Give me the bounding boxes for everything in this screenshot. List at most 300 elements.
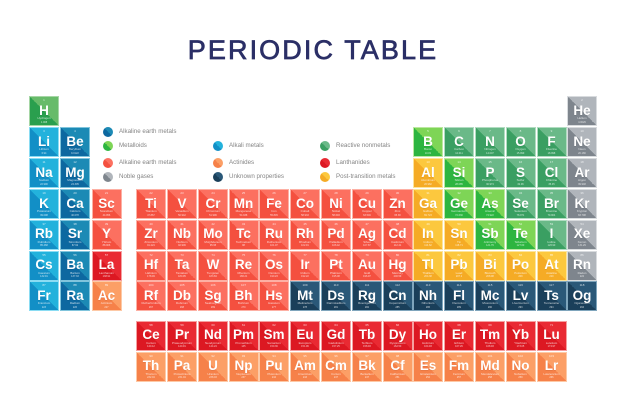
- element: At: At: [544, 257, 559, 272]
- element: W: 183.84: [209, 275, 217, 278]
- element: Og: Og: [573, 288, 591, 302]
- element: Te: Te: [513, 226, 528, 241]
- element: Fm: 257: [457, 376, 461, 379]
- element: Yb: [506, 320, 536, 350]
- element: U: U: [208, 358, 218, 373]
- element: Ag: [352, 220, 382, 250]
- legend item: post-transition metals: [320, 172, 396, 182]
- element: Pb: 207.2: [456, 275, 462, 278]
- element: Te: 127.60: [517, 244, 524, 247]
- element: Sg: 106: [210, 283, 216, 287]
- legend item: reactive nonmetals: Reactive nonmetals: [336, 142, 390, 149]
- element: Kr: [567, 189, 597, 219]
- element: P: 15: [488, 160, 492, 164]
- element: Cd: 48: [396, 222, 399, 226]
- legend item: reactive nonmetals: [320, 141, 390, 151]
- element: Fl: [444, 281, 474, 311]
- element: Mg: 12: [73, 160, 77, 164]
- element: Tl: [413, 250, 443, 280]
- element: In: Indium: [423, 240, 432, 244]
- element: Ir: 77: [303, 252, 307, 256]
- element: Mo: Mo: [203, 226, 223, 241]
- element: Sb: [475, 220, 505, 250]
- element: Fe: [259, 189, 289, 219]
- element: Rg: 282: [365, 306, 369, 308]
- element: Mn: Mn: [234, 196, 253, 210]
- element: Pa: 231.04: [178, 376, 186, 379]
- element: Lv: 116: [518, 283, 523, 287]
- element: C: 6: [458, 129, 460, 133]
- element: Tc: Tc: [236, 226, 251, 241]
- element: Am: Americium: [298, 372, 312, 376]
- element: U: [198, 352, 228, 382]
- element: Th: 232.04: [147, 376, 155, 379]
- element: Nd: Neodymium: [205, 340, 221, 344]
- element: Ac: [92, 281, 122, 311]
- element: Tl: 81: [426, 252, 430, 256]
- element: Cl: [536, 158, 566, 188]
- element: Md: [475, 352, 505, 382]
- element: Es: 99: [426, 354, 430, 358]
- element: Ba: 56: [73, 252, 77, 256]
- element: Au: 196.97: [363, 275, 371, 278]
- element: C: [444, 127, 474, 157]
- element: Po: Polonium: [514, 270, 527, 274]
- element: Be: 4: [74, 129, 76, 133]
- element: Ca: Ca: [66, 196, 84, 210]
- element: Gd: Gadolinium: [328, 340, 344, 344]
- element: Lv: Livermorium: [512, 301, 529, 305]
- element: Br: 35: [550, 191, 553, 195]
- element: N: N: [485, 134, 495, 148]
- element: W: Tungsten: [207, 270, 219, 274]
- element: Ar: 18: [580, 160, 584, 164]
- element: Lv: [506, 281, 536, 311]
- element: P: 30.974: [486, 182, 494, 186]
- element: Rg: Roentgenium: [358, 301, 376, 305]
- legend: [103, 127, 396, 182]
- element: Mt: 278: [303, 306, 307, 308]
- element: Hg: Hg: [388, 257, 406, 272]
- element: Fe: 55.845: [270, 214, 278, 216]
- element: Np: [228, 352, 258, 382]
- element: Zr: 40: [149, 222, 153, 226]
- element: Hg: 80: [396, 252, 399, 256]
- element: P: P: [485, 164, 494, 180]
- element: Es: 252: [426, 376, 430, 379]
- element: Ag: Ag: [358, 226, 376, 241]
- legend item: noble gases: [103, 172, 154, 182]
- legend item: unknown properties: [213, 172, 284, 182]
- element: Xe: [567, 220, 597, 250]
- element: Ti: 22: [149, 191, 153, 195]
- element: Tc: Technetium: [236, 240, 251, 244]
- element: V: 50.942: [178, 214, 186, 216]
- element: Db: Db: [173, 288, 191, 302]
- element: Pb: [444, 250, 474, 280]
- element: Ga: 69.723: [424, 214, 432, 216]
- element: Rh: 45: [303, 222, 307, 226]
- element: Br: [536, 189, 566, 219]
- element: Bi: 208.98: [486, 275, 494, 278]
- element: Rf: 104: [148, 283, 154, 287]
- element: Dy: Dy: [389, 327, 406, 342]
- element: Rb: Rubidium: [38, 240, 50, 244]
- element: Sm: [259, 320, 289, 350]
- element: S: 32.06: [517, 182, 524, 186]
- element: Co: Co: [296, 196, 314, 210]
- element: Pt: Platinum: [330, 270, 342, 274]
- element: Sb: Sb: [481, 226, 499, 241]
- element: Pa: 91: [180, 354, 184, 358]
- element: Si: Silicon: [455, 178, 463, 182]
- element: Ba: Ba: [66, 257, 84, 272]
- element: Md: Md: [480, 358, 500, 373]
- element: Yb: Yb: [512, 327, 529, 342]
- element: Sn: 50: [457, 222, 461, 226]
- element: Cr: [198, 189, 228, 219]
- element: Sr: 87.62: [72, 244, 78, 247]
- element: As: 74.922: [486, 214, 494, 216]
- element: Cr: Cr: [205, 196, 220, 210]
- element: K: 19: [42, 191, 46, 195]
- element: Cs: 55: [42, 252, 46, 256]
- element: Be: [60, 127, 90, 157]
- element: Se: [506, 189, 536, 219]
- element: Co: Cobalt: [301, 209, 309, 213]
- element: I: [536, 220, 566, 250]
- element: Pu: Pu: [265, 358, 283, 373]
- element: Np: Np: [234, 358, 252, 373]
- element: B: Boron: [424, 147, 432, 151]
- element: Rh: Rhodium: [299, 240, 311, 244]
- element: Cf: [382, 352, 412, 382]
- element: Nd: Nd: [204, 327, 222, 342]
- element: Ne: [567, 127, 597, 157]
- element: Ga: Ga: [419, 196, 437, 210]
- element: Ho: 164.93: [424, 345, 432, 348]
- element: Sc: [92, 189, 122, 219]
- element: Cs: 132.91: [40, 275, 48, 278]
- element: Ge: [444, 189, 474, 219]
- element: Hf: 178.49: [147, 275, 155, 278]
- element: Ts: 117: [549, 283, 554, 287]
- element: Am: Am: [294, 358, 316, 373]
- element: Os: 76: [272, 252, 276, 256]
- element: In: 114.82: [424, 244, 432, 247]
- element: Hs: Hs: [265, 288, 283, 302]
- element: Lu: [536, 320, 566, 350]
- element: S: S: [516, 164, 525, 180]
- element: Tm: 69: [488, 322, 492, 326]
- element: Sn: Tin: [457, 240, 461, 244]
- element: Ta: 73: [180, 252, 184, 256]
- element: Sg: Seaborgium: [205, 301, 221, 305]
- element: Re: Re: [235, 257, 252, 272]
- element: Ti: [136, 189, 166, 219]
- element: Si: [444, 158, 474, 188]
- element: Lu: Lutetium: [546, 340, 557, 344]
- element: I: Iodine: [547, 240, 556, 244]
- element: Y: Y: [102, 226, 111, 241]
- element: S: [506, 158, 536, 188]
- element: Nb: Nb: [173, 226, 191, 241]
- element: Rb: [29, 220, 59, 250]
- element: Re: [228, 250, 258, 280]
- element: Ac: Actinium: [101, 301, 112, 305]
- element: Tc: [228, 220, 258, 250]
- element: Rn: [567, 250, 597, 280]
- element: Ge: Ge: [450, 196, 468, 210]
- element: Nd: 60: [211, 322, 215, 326]
- element: He: He: [573, 102, 591, 118]
- element: Og: Oganesson: [574, 301, 590, 305]
- element: Nh: Nh: [419, 288, 437, 302]
- element: Pu: 244: [272, 376, 276, 379]
- element: Xe: 54: [580, 222, 584, 226]
- element: At: 85: [550, 252, 553, 256]
- element: Cl: Chlorine: [546, 178, 557, 182]
- element: Fr: 223: [42, 306, 46, 308]
- element: Hg: [382, 250, 412, 280]
- element: Sc: 44.956: [103, 214, 110, 216]
- title: PERIODIC TABLE: [188, 35, 438, 65]
- element: Sn: [444, 220, 474, 250]
- element: Fr: Fr: [37, 288, 51, 302]
- element: Pt: 78: [334, 252, 338, 256]
- element: Al: Al: [421, 164, 435, 180]
- element: Ti: Titanium: [145, 209, 157, 213]
- element: Cr: Chromium: [206, 209, 220, 213]
- element: Pd: Palladium: [329, 240, 343, 244]
- element: Li: 3: [43, 129, 45, 133]
- element: Ga: 31: [426, 191, 430, 195]
- element: La: Lanthanum: [99, 270, 114, 274]
- element: F: [536, 127, 566, 157]
- element: H: Hydrogen: [37, 116, 50, 120]
- element: Cf: Cf: [390, 358, 405, 373]
- element: Tc: 43: [242, 222, 245, 226]
- element: Fl: 289: [457, 306, 461, 308]
- element: Tb: Terbium: [362, 340, 372, 344]
- element: Li: 6.94: [42, 152, 46, 154]
- element: C: Carbon: [454, 147, 464, 151]
- element: Ru: Ru: [265, 226, 283, 241]
- element: Ne: 20.180: [578, 152, 586, 154]
- element: Rg: Rg: [358, 288, 376, 302]
- element: Tm: [475, 320, 505, 350]
- element: U: Uranium: [207, 372, 219, 376]
- element: Cl: 17: [550, 160, 553, 164]
- element: Bk: Bk: [358, 358, 376, 373]
- element: Bh: [228, 281, 258, 311]
- element: Pt: 195.08: [332, 275, 340, 278]
- element: Bi: 83: [488, 252, 492, 256]
- element: F: 9: [551, 129, 552, 133]
- element: Na: 22.990: [40, 182, 48, 186]
- element: Pa: Protactinium: [174, 372, 190, 376]
- element: Cd: 112.41: [394, 244, 401, 247]
- legend item: alkaline earth metals: [103, 127, 176, 137]
- element: S: 16: [519, 160, 522, 164]
- element: Np: Neptunium: [236, 372, 251, 376]
- element: Tl: 204.38: [424, 275, 432, 278]
- element: In: 49: [426, 222, 430, 226]
- element: Rb: 85.468: [40, 244, 48, 247]
- element: Eu: Europium: [299, 340, 311, 344]
- element: Es: Es: [420, 358, 436, 373]
- element: N: Nitrogen: [484, 147, 496, 151]
- element: Og: 294: [580, 306, 584, 308]
- element: Ga: [413, 189, 443, 219]
- element: Lr: Lawrencium: [543, 372, 560, 376]
- element: Lu: Lu: [543, 327, 560, 342]
- element: Ce: Cerium: [146, 340, 156, 344]
- element: Cn: [382, 281, 412, 311]
- element: Er: 68: [457, 322, 461, 326]
- element: Hf: 72: [149, 252, 153, 256]
- element: Sg: 269: [211, 306, 215, 308]
- element: Hg: Mercury: [392, 270, 403, 274]
- element: No: Nobelium: [514, 372, 527, 376]
- element: Ca: Calcium: [70, 209, 80, 213]
- element: Hf: Hafnium: [145, 270, 157, 274]
- element: Sr: [60, 220, 90, 250]
- element: Pu: Plutonium: [267, 372, 281, 376]
- element: Ir: Iridium: [300, 270, 310, 274]
- element: Ds: Ds: [327, 288, 345, 302]
- element: Pd: [321, 220, 351, 250]
- legend item: lanthanides: [320, 158, 370, 168]
- element: Cf: Californium: [390, 372, 405, 376]
- element: Cr: 51.996: [209, 214, 217, 216]
- element: Ta: Ta: [175, 257, 189, 272]
- element: Mn: Manganese: [236, 209, 251, 213]
- element: F: Fluorine: [546, 147, 557, 151]
- element: In: In: [422, 226, 434, 241]
- element: Dy: Dysprosium: [390, 340, 405, 344]
- element: Bk: Berkelium: [360, 372, 374, 376]
- element: Cu: Cu: [358, 196, 376, 210]
- element: Dy: 66: [396, 322, 399, 326]
- element: Dy: 162.50: [394, 345, 401, 348]
- element: Cl: Cl: [545, 164, 558, 180]
- element: Pb: Pb: [450, 257, 468, 272]
- element: Nh: [413, 281, 443, 311]
- element: N: [475, 127, 505, 157]
- element: Po: [506, 250, 536, 280]
- element: Ne: 10: [580, 129, 584, 133]
- element: Ti: 47.867: [147, 214, 155, 216]
- element: Si: 14: [457, 160, 461, 164]
- element: Bh: Bohrium: [238, 301, 249, 305]
- legend item: alkali metals: [213, 141, 264, 151]
- element: Kr: Krypton: [577, 209, 587, 213]
- element: La: 57: [105, 252, 108, 256]
- element: Hs: 108: [271, 283, 276, 287]
- element: Eu: [290, 320, 320, 350]
- element: No: [506, 352, 536, 382]
- element: K: Potassium: [37, 209, 51, 213]
- element: Cd: Cadmium: [391, 240, 404, 244]
- element: Sb: Antimony: [484, 240, 496, 244]
- element: Fr: 87: [42, 283, 46, 287]
- element: Am: [290, 352, 320, 382]
- element: Mg: [60, 158, 90, 188]
- element: O: Oxygen: [515, 147, 526, 151]
- element: Md: 101: [487, 354, 492, 358]
- element: Si: 28.085: [455, 182, 463, 186]
- element: K: [29, 189, 59, 219]
- element: Br: Br: [544, 196, 559, 210]
- element: Po: 209: [518, 275, 523, 278]
- element: Rg: [352, 281, 382, 311]
- element: Y: [92, 220, 122, 250]
- element: Rg: 111: [365, 283, 369, 287]
- element: F: F: [547, 134, 556, 148]
- element: Ca: 40.078: [71, 214, 79, 216]
- element: Mo: 42: [211, 222, 215, 226]
- element: Bh: Bh: [234, 288, 252, 302]
- element: W: W: [207, 257, 219, 272]
- element: Er: 167.26: [455, 345, 463, 348]
- element: Cs: [29, 250, 59, 280]
- element: Zn: Zinc: [395, 209, 400, 213]
- element: Br: Bromine: [546, 209, 557, 213]
- element: Cs: Caesium: [38, 270, 50, 274]
- element: Mo: [198, 220, 228, 250]
- element: C: C: [454, 134, 464, 148]
- element: Al: 13: [426, 160, 430, 164]
- element: Ni: [321, 189, 351, 219]
- element: Ni: Nickel: [332, 209, 340, 213]
- element: Zn: 30: [396, 191, 399, 195]
- element: Ca: [60, 189, 90, 219]
- element: Am: 95: [303, 354, 307, 358]
- element: La: [92, 250, 122, 280]
- element: Ag: Silver: [363, 240, 371, 244]
- element: P: [475, 158, 505, 188]
- element: N: 14.007: [486, 152, 494, 154]
- element: Fr: Francium: [38, 301, 50, 305]
- element: Db: Dubnium: [176, 301, 188, 305]
- element: Ge: Germanium: [451, 209, 467, 213]
- element: Eu: 63: [303, 322, 307, 326]
- element: Cu: 63.546: [363, 214, 371, 216]
- element: Sr: Strontium: [69, 240, 81, 244]
- element: Hf: [136, 250, 166, 280]
- element: Sr: Sr: [68, 226, 82, 241]
- legend item: unknown properties: Unknown properties: [229, 173, 284, 180]
- element: Nh: Nihonium: [422, 301, 434, 305]
- element: Ag: 47: [365, 222, 369, 226]
- element: Og: [567, 281, 597, 311]
- element: Pd: 106.42: [332, 244, 340, 247]
- element: Rh: 102.91: [301, 244, 309, 247]
- element: Pm: 145: [241, 345, 246, 348]
- element: O: 8: [520, 129, 521, 133]
- element: Md: Mendelevium: [481, 372, 499, 376]
- element: Sn: Sn: [450, 226, 468, 241]
- element: Xe: Xe: [574, 226, 590, 241]
- element: Tm: 168.93: [486, 345, 494, 348]
- element: Mg: Mg: [65, 164, 85, 180]
- element: Sc: 21: [105, 191, 108, 195]
- element: Pu: [259, 352, 289, 382]
- element: Tm: Thulium: [485, 340, 495, 344]
- element: Ra: 88: [73, 283, 77, 287]
- element: B: B: [423, 134, 433, 148]
